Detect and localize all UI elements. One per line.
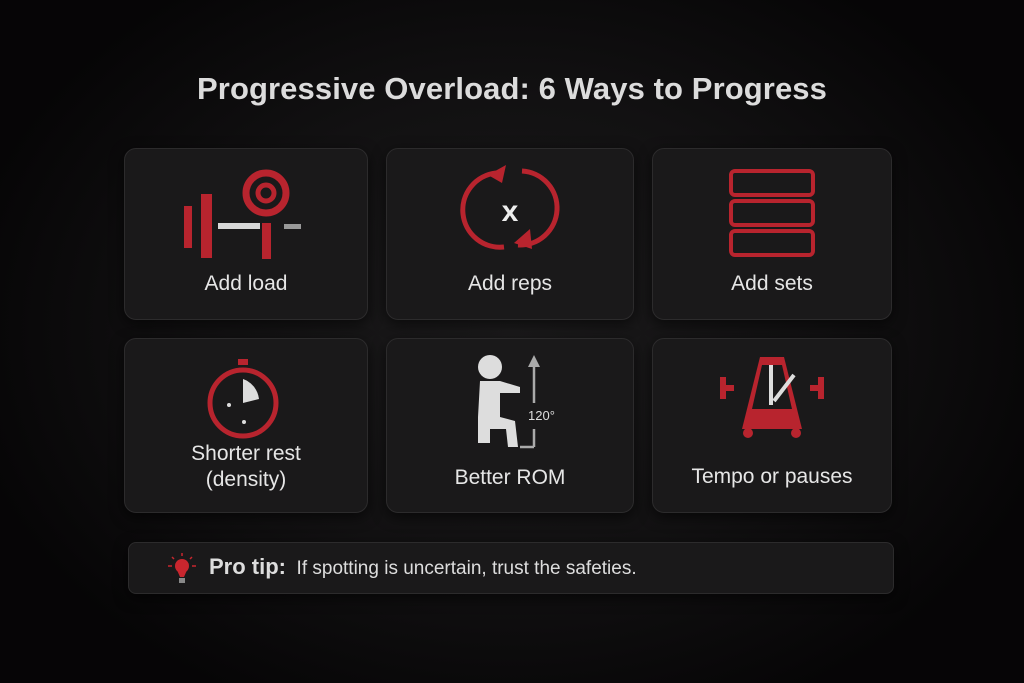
- icon: cycle x: [460, 165, 560, 250]
- callout: pro tip: [128, 542, 894, 594]
- title: Progressive Overload: 6 Ways to Progress: [197, 71, 827, 106]
- label: Add reps: [468, 272, 552, 295]
- icon: metronome: [720, 357, 824, 438]
- icon: lightbulb: [168, 553, 196, 583]
- icon: squat figure: [478, 355, 555, 448]
- icon: cycle x: x: [502, 195, 519, 228]
- label: Add load: [205, 272, 287, 295]
- icon: stopwatch: [208, 359, 278, 438]
- icon: stacked sets: [729, 169, 815, 257]
- label: (density): [206, 468, 286, 491]
- label: Tempo or pauses: [691, 465, 853, 488]
- icon: squat figure: 120°: [528, 408, 555, 423]
- panel: add load: [124, 148, 368, 320]
- label: [191, 442, 301, 491]
- panel: add sets: [652, 148, 892, 320]
- panel: better ROM: [386, 338, 634, 513]
- panel: shorter rest: [124, 338, 368, 513]
- label: Shorter rest: [191, 442, 301, 465]
- label: Better ROM: [455, 466, 565, 489]
- panel: add reps: [386, 148, 634, 320]
- label: Add sets: [731, 272, 813, 295]
- icon: barbell: [184, 170, 301, 259]
- panel: tempo: [652, 338, 892, 513]
- tip text: Pro tip: If spotting is uncertain, trust the safeties.: [209, 554, 637, 579]
